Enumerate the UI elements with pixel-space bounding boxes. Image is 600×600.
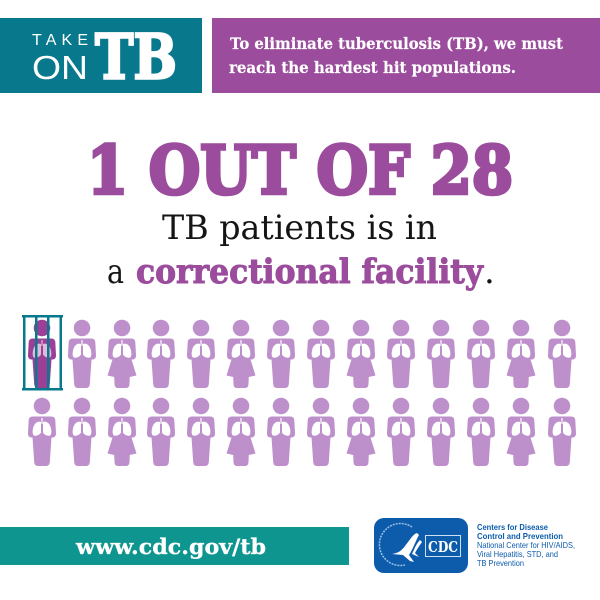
intro text line 2: reach the hardest hit populations. <box>229 58 516 77</box>
organization text <box>477 522 575 568</box>
organization text: Control and Prevention <box>477 531 563 541</box>
logo: CDC <box>374 518 468 573</box>
panel: intro statement <box>212 18 600 93</box>
subheading line 1: TB patients is in <box>162 208 437 248</box>
organization text: Viral Hepatitis, STD, and <box>477 549 558 559</box>
subheading line 2: . <box>484 252 495 292</box>
subheading line 2: correctional facility <box>136 252 484 292</box>
pictogram: 28 TB patients <box>22 315 576 466</box>
row 1 of patients <box>68 320 576 388</box>
headline statistic: 1 OUT OF 28 <box>87 132 513 210</box>
icon: HHS seal <box>379 524 422 566</box>
logo word: on: ON <box>32 49 88 86</box>
organization text: TB Prevention <box>477 558 524 568</box>
footer: website banner <box>0 527 349 565</box>
row 2 of patients <box>28 398 576 466</box>
intro text line 1: To eliminate tuberculosis (TB), we must <box>230 34 564 53</box>
icon: incarcerated patient behind bars <box>22 315 63 390</box>
CDC wordmark: CDC <box>428 538 458 556</box>
subheading line 2: a <box>107 252 124 292</box>
website address: www.cdc.gov/tb <box>75 535 266 560</box>
organization text: Centers for Disease <box>477 522 548 532</box>
logo word: TB: TB <box>95 20 177 94</box>
panel: Take on TB logo <box>0 18 202 94</box>
organization text: National Center for HIV/AIDS, <box>477 540 575 550</box>
logo word: take: TAKE <box>32 32 88 49</box>
